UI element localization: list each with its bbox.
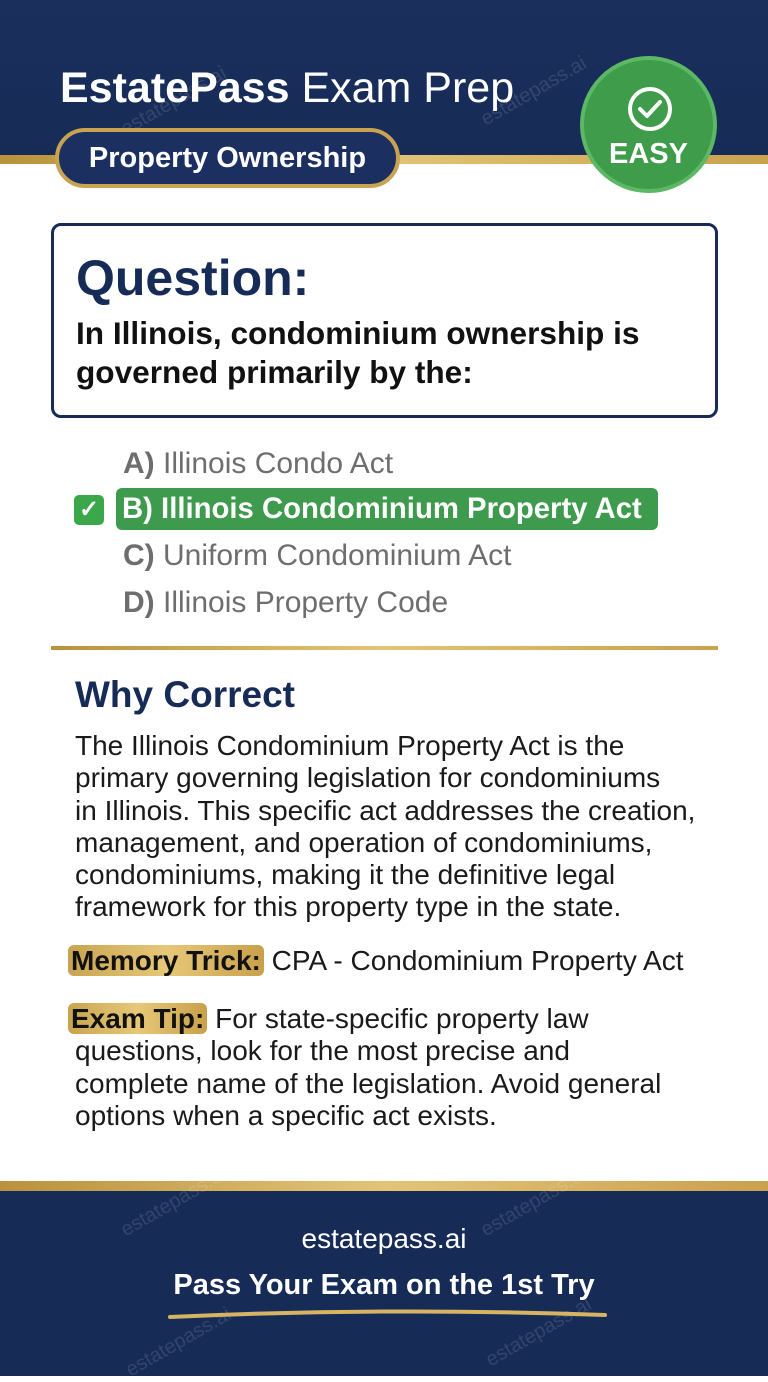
- exam tip: [68, 1003, 661, 1131]
- difficulty badge: [580, 56, 717, 193]
- explanation text: condominiums, making it the definitive legal: [75, 859, 615, 890]
- underline swoosh: [168, 1310, 607, 1319]
- footer band: estatepass.ai: [117, 1163, 230, 1241]
- gold footer line: [0, 1181, 768, 1191]
- question box: In Illinois, condominium ownership is: [76, 315, 639, 351]
- explanation text: primary governing legislation for condominiums: [75, 762, 660, 793]
- difficulty badge: EASY: [609, 138, 688, 170]
- explanation text: in Illinois. This specific act addresses the creation,: [75, 795, 695, 826]
- memory trick: Memory Trick: CPA - Condominium Property Act: [71, 945, 684, 976]
- icon: check circle: [628, 87, 672, 131]
- question box: [51, 223, 718, 418]
- tagline: Pass Your Exam on the 1st Try: [173, 1269, 595, 1301]
- icon: green check: [74, 495, 104, 525]
- gold header line: [0, 155, 768, 164]
- explanation text: management, and operation of condominiums,: [75, 827, 652, 858]
- footer band: [0, 1191, 768, 1376]
- category pill: [55, 128, 400, 188]
- answer options: C) Uniform Condominium Act: [123, 539, 511, 572]
- explanation text: framework for this property type in the state.: [75, 891, 621, 922]
- exam tip: questions, look for the most precise and: [75, 1035, 570, 1066]
- question box: Question:: [76, 250, 309, 306]
- exam tip: options when a specific act exists.: [75, 1100, 497, 1131]
- footer band: estatepass.ai: [122, 1303, 235, 1381]
- exam tip: complete name of the legislation. Avoid general: [75, 1068, 661, 1099]
- header band: estatepass.ai: [117, 62, 230, 140]
- icon: green check: ✓: [79, 496, 99, 523]
- correct answer: B) Illinois Condominium Property Act: [122, 492, 642, 525]
- answer options: D) Illinois Property Code: [123, 586, 448, 619]
- explanation text: [75, 730, 695, 922]
- question box: governed primarily by the:: [76, 354, 473, 390]
- footer band: estatepass.ai: [477, 1163, 590, 1241]
- footer band: estatepass.ai: [482, 1293, 595, 1371]
- header band: estatepass.ai: [477, 52, 590, 130]
- exam tip: Exam Tip: For state-specific property law: [71, 1003, 589, 1034]
- category pill: Property Ownership: [89, 142, 366, 174]
- header band: [0, 0, 768, 157]
- answer options: [74, 447, 658, 619]
- heading: why correct: Why Correct: [75, 674, 295, 715]
- explanation text: The Illinois Condominium Property Act is the: [75, 730, 624, 761]
- title: EstatePass Exam Prep: [60, 64, 514, 112]
- answer options: A) Illinois Condo Act: [123, 447, 393, 480]
- footer url: estatepass.ai: [302, 1223, 466, 1254]
